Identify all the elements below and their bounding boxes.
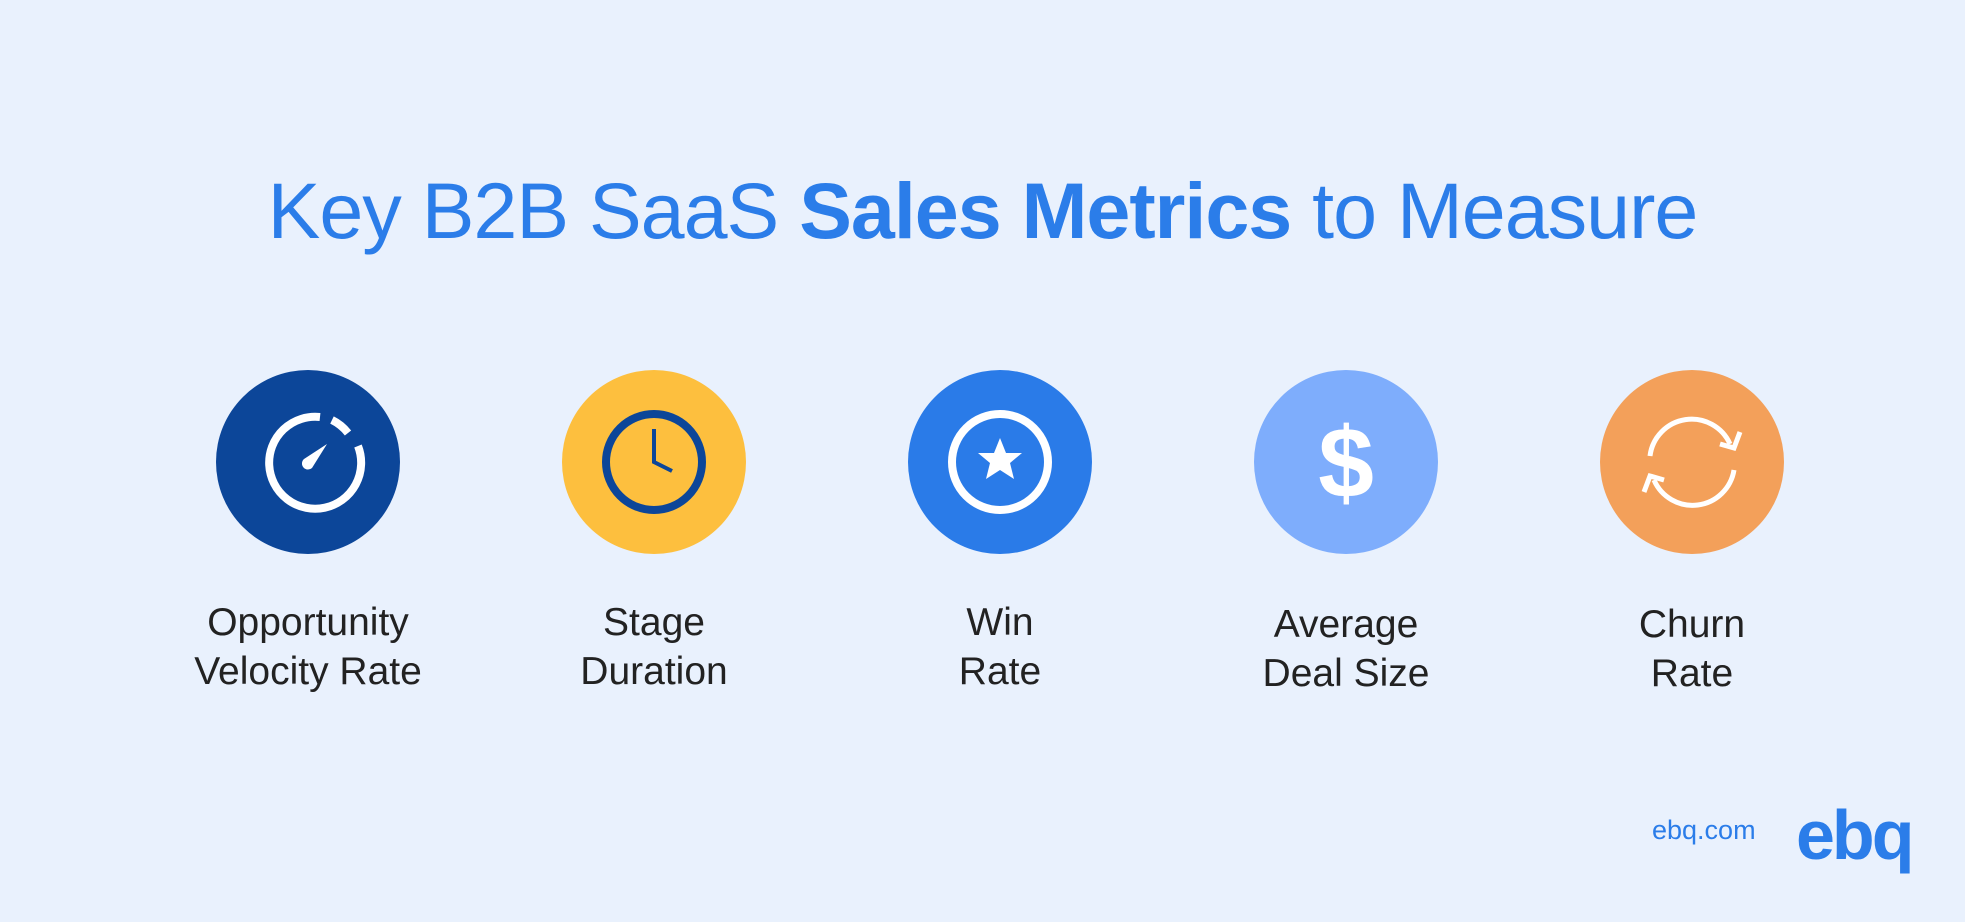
- label: opportunity velocity rate: [194, 601, 422, 693]
- label: opportunity velocity rate: Velocity Rate: [194, 650, 422, 693]
- footer url: ebq.com: [1652, 815, 1756, 845]
- label: churn rate: Rate: [1651, 652, 1733, 695]
- icon: refresh: [1600, 370, 1784, 554]
- label: churn rate: [1639, 603, 1745, 695]
- label: win rate: Win: [966, 601, 1034, 644]
- label: stage duration: Stage: [603, 601, 705, 644]
- title: Key B2B SaaS Sales Metrics to Measure: [268, 166, 1697, 255]
- label: average deal size: Average: [1274, 603, 1418, 646]
- label: average deal size: [1263, 603, 1429, 695]
- icon: dollar: $: [1318, 407, 1374, 519]
- label: churn rate: Churn: [1639, 603, 1745, 646]
- icon: star badge: [908, 370, 1092, 554]
- label: stage duration: [580, 601, 728, 693]
- label: stage duration: Duration: [580, 650, 728, 693]
- icon: dollar: [1254, 370, 1438, 554]
- icon: clock: [562, 370, 746, 554]
- label: average deal size: Deal Size: [1263, 652, 1429, 695]
- label: win rate: [959, 601, 1041, 693]
- label: win rate: Rate: [959, 650, 1041, 693]
- icon: speedometer: [216, 370, 400, 554]
- label: opportunity velocity rate: Opportunity: [207, 601, 409, 644]
- logo: ebq: [1796, 796, 1911, 874]
